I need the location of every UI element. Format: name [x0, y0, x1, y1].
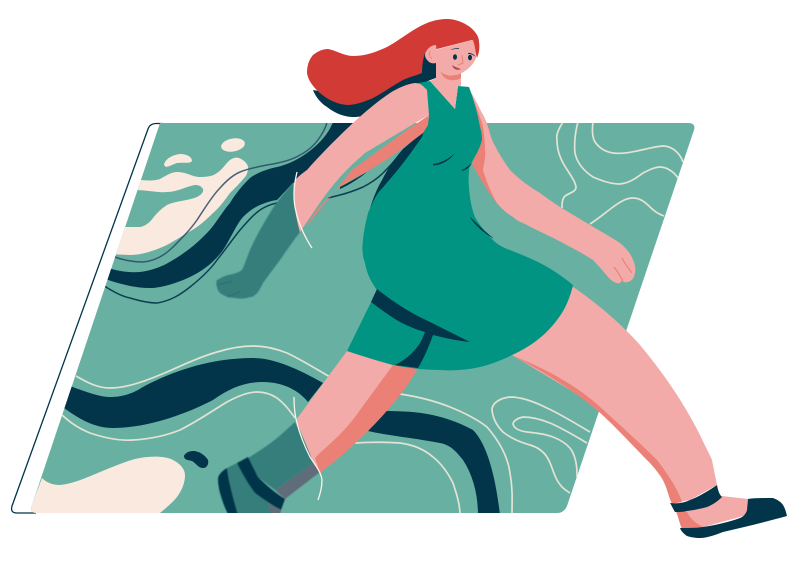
dark shadow behind back arm — [364, 132, 430, 236]
hair: dark back layer — [313, 52, 438, 117]
white arc: back arm — [294, 172, 312, 248]
ghost leg and shoe: seen through panel — [218, 422, 320, 515]
mouth — [452, 65, 461, 70]
cream blob: small left — [164, 154, 192, 167]
face — [435, 40, 476, 75]
contour lines: bottom — [60, 346, 590, 515]
dark river: bottom right — [368, 411, 500, 515]
cream blob: top shore — [105, 158, 248, 255]
front leg — [512, 287, 748, 529]
dress — [347, 81, 573, 370]
panel outline — [12, 124, 163, 513]
ear inner — [430, 51, 432, 59]
hair: main — [307, 19, 479, 105]
back leg — [296, 351, 418, 473]
right arm shadow — [469, 90, 498, 205]
dark wisp under arm — [340, 172, 367, 189]
ghost arm: seen through panel — [216, 183, 300, 299]
ear — [425, 45, 438, 63]
foot — [675, 496, 748, 528]
shoe: front foot — [680, 498, 787, 538]
dark blob: pebble — [184, 451, 208, 468]
contour lines: top right — [557, 122, 683, 224]
dark river: bottom left — [60, 358, 323, 428]
dark river: top — [100, 122, 370, 288]
back arm — [294, 83, 429, 232]
right arm — [469, 89, 635, 283]
eyes and brows — [450, 48, 476, 60]
panel: teal landscape — [20, 122, 700, 516]
thin line: above top river — [112, 122, 327, 262]
finger lines — [614, 258, 632, 282]
thin line: below top river — [100, 160, 395, 303]
cream blob: bottom shore — [31, 456, 185, 513]
white arc: back leg — [294, 397, 322, 500]
dress dark fold — [371, 289, 470, 368]
shoe strap: front foot — [670, 485, 722, 512]
chin shadow — [441, 72, 461, 80]
figure: woman — [294, 19, 787, 538]
neck and chest — [430, 60, 461, 109]
dress crease: side — [462, 163, 472, 171]
dress crease: waist — [470, 217, 493, 238]
dress crease: chest — [433, 153, 455, 166]
cream blob: small top — [221, 138, 245, 152]
nose — [458, 55, 463, 65]
